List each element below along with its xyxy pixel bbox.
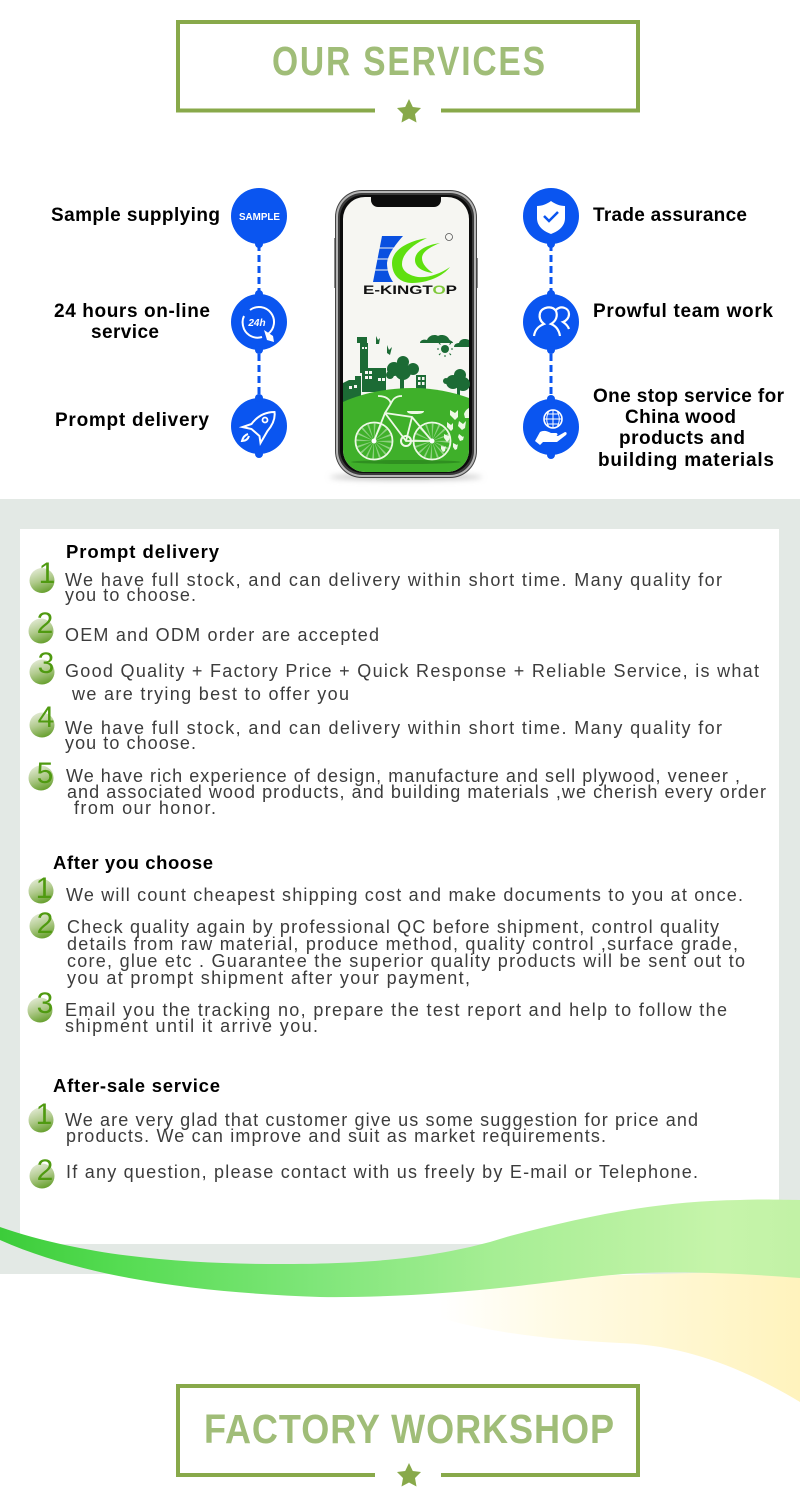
item 5: We have rich experience of design, manufacture and sell plywood, veneer , (66, 766, 740, 786)
item 3: 3 (37, 987, 53, 1020)
label: one stop service (593, 386, 785, 471)
item 3: Email you the tracking no, prepare the test report and help to follow the (65, 1000, 727, 1020)
panel: details background (0, 499, 800, 1274)
label: one stop service: products and (619, 428, 745, 449)
item 2: 2 (37, 607, 53, 640)
item 2 (28, 607, 379, 645)
skyline (343, 335, 470, 406)
saddle (407, 411, 424, 414)
bicycle (356, 396, 450, 460)
item 1: We have full stock, and can delivery within short time. Many quality for (65, 570, 722, 590)
icon: 24 hours: 24h (247, 318, 266, 329)
heading: after you choose: After you choose (53, 852, 213, 873)
item 4: 4 (38, 701, 54, 734)
item 1 (30, 557, 722, 605)
heading: prompt delivery: Prompt delivery (66, 541, 220, 562)
item 1: We are very glad that customer give us some suggestion for price and (65, 1110, 698, 1130)
item 3 (30, 647, 759, 704)
heading: factory workshop (178, 1386, 638, 1486)
icon: sample: SAMPLE (239, 212, 280, 223)
label: 24 hours on-line service: service (91, 322, 159, 343)
heading: factory workshop: FACTORY WORKSHOP (204, 1407, 614, 1453)
icon: globe in hand (523, 395, 579, 459)
phone (330, 190, 482, 480)
item 2: details from raw material, produce method, quality control ,surface grade, (67, 934, 738, 954)
phone notch (371, 197, 441, 207)
item 3: we are trying best to offer you (71, 684, 349, 704)
item 1: We will count cheapest shipping cost and make documents to you at once. (66, 885, 743, 905)
item 2: OEM and ODM order are accepted (65, 625, 379, 645)
item 4: We have full stock, and can delivery within short time. Many quality for (65, 718, 722, 738)
panel: white card (20, 529, 779, 1244)
icon: team (523, 290, 579, 354)
item 1: you to choose. (65, 585, 196, 605)
logo: small crescent (415, 243, 440, 273)
section: prompt delivery (28, 541, 766, 818)
butterflies (441, 408, 469, 452)
heading: our services: OUR SERVICES (272, 38, 545, 84)
logo: wordmark: E-KINGT O P (363, 285, 457, 297)
label: one stop service: One stop service for (593, 386, 785, 407)
item 3: shipment until it arrive you. (65, 1016, 318, 1036)
registered mark (446, 234, 452, 240)
icon: sample (231, 188, 287, 248)
item 4: you to choose. (65, 733, 196, 753)
skyline windows (349, 347, 424, 389)
hill (343, 388, 469, 472)
connector: left dashed line (258, 244, 260, 398)
icon: 24 hours (231, 290, 287, 354)
item 2: If any question, please contact with us freely by E-mail or Telephone. (66, 1162, 698, 1182)
item 3: Good Quality + Factory Price + Quick Response + Reliable Service, is what (65, 661, 759, 681)
logo: green crescent (392, 238, 450, 283)
item 5: from our honor. (74, 798, 216, 818)
phone screen (343, 197, 470, 472)
label: prompt delivery: Prompt delivery (55, 410, 209, 431)
label: 24 hours on-line service: 24 hours on-line (54, 301, 210, 322)
item 1 (28, 872, 743, 905)
item 2 (30, 907, 745, 988)
label: one stop service: building materials (598, 450, 774, 471)
item 5: 5 (37, 757, 53, 790)
services diagram (51, 188, 785, 480)
section: after-sale service (28, 1075, 698, 1188)
item 4 (30, 701, 722, 753)
item 1: products. We can improve and suit as market requirements. (66, 1126, 606, 1146)
wave: yellow (440, 1270, 800, 1402)
section: after you choose (28, 852, 745, 1036)
item 3 (28, 987, 727, 1036)
icon: shield (523, 188, 579, 248)
item 1: 1 (36, 1098, 52, 1131)
item 2: 2 (37, 1154, 53, 1187)
item 1: 1 (39, 557, 55, 590)
item 5 (28, 757, 766, 818)
item 1 (28, 1098, 698, 1146)
item 5: and associated wood products, and building materials ,we cherish every order (67, 782, 766, 802)
label: one stop service: China wood (625, 407, 736, 428)
logo: block stripes (374, 248, 395, 270)
logo: blue block (373, 236, 403, 282)
label: sample supplying: Sample supplying (51, 205, 220, 226)
item 2: you at prompt shipment after your payment, (67, 968, 470, 988)
icon: rocket (231, 394, 287, 458)
item 2: core, glue etc . Guarantee the superior quality products will be sent out to (67, 951, 745, 971)
item 2: 2 (37, 907, 53, 940)
item 1: 1 (36, 872, 52, 905)
heading: after-sale service: After-sale service (53, 1075, 220, 1096)
connector: right dashed line (550, 244, 552, 398)
item 3: 3 (38, 647, 54, 680)
wave: green (0, 1200, 800, 1297)
item 2 (30, 1154, 698, 1188)
label: 24 hours on-line service (54, 301, 210, 343)
heading: our services (178, 22, 638, 122)
item 2: Check quality again by professional QC before shipment, control quality (67, 917, 719, 937)
label: prowful team work: Prowful team work (593, 301, 773, 322)
label: trade assurance: Trade assurance (593, 205, 747, 226)
